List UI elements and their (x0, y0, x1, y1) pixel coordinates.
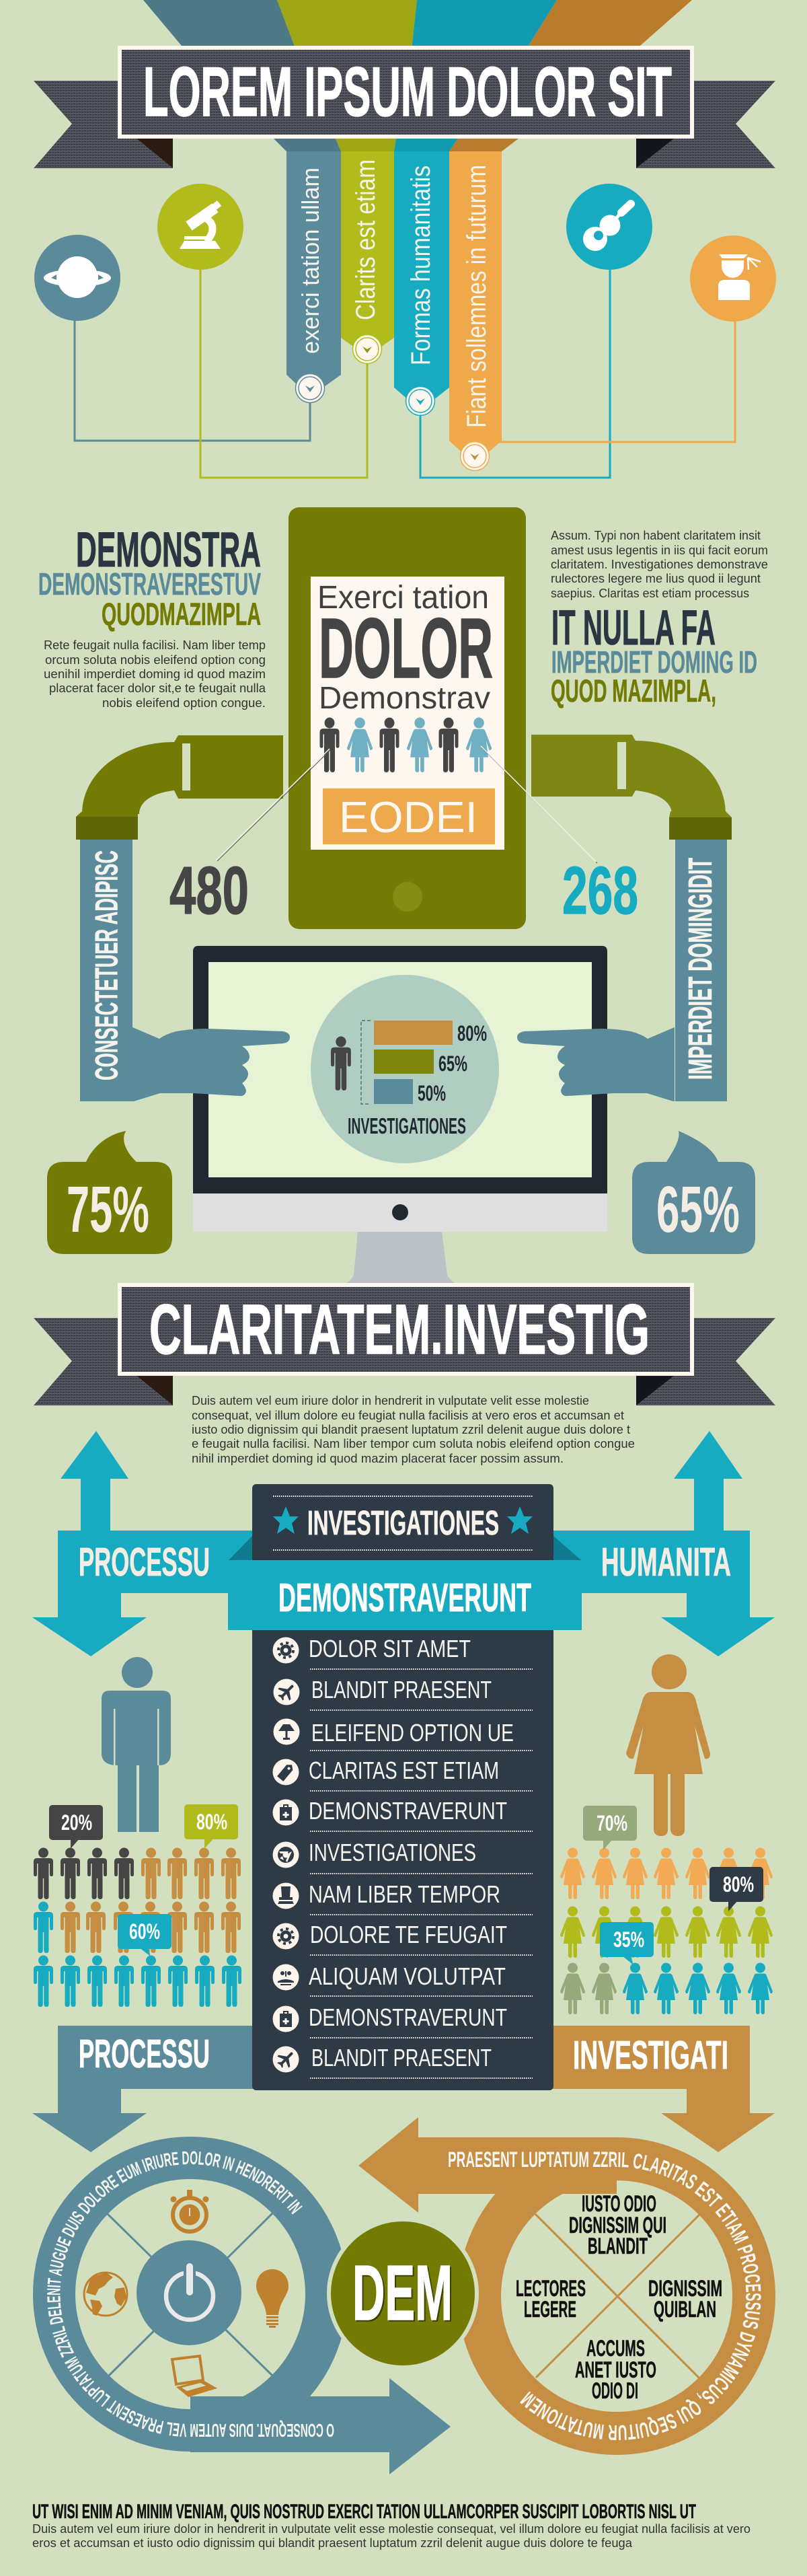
list rows: BLANDIT PRAESENT (311, 2044, 492, 2071)
quadrant labels: QUIBLAN (654, 2297, 716, 2322)
quadrant labels: ACCUMS (586, 2336, 645, 2361)
panel heading: INVESTIGATIONES (307, 1504, 499, 1542)
footer paragraph (32, 2522, 751, 2550)
center badge DEM (327, 2217, 479, 2369)
star right (507, 1506, 533, 1534)
footer paragraph: Duis autem vel eum iriure dolor in hendrerit in vulputate velit esse molestie consequat, vel illum dolore eu feugiat nulla facilisis at vero (32, 2522, 751, 2536)
callout 80% green (184, 1804, 238, 1849)
orange button (323, 788, 495, 844)
quadrant labels: DIGNISSIM (648, 2276, 722, 2302)
vertical bar: imperdiet: IMPERDIET DOMINGIDIT (683, 858, 719, 1080)
callout 80% green: 80% (196, 1810, 227, 1834)
pointer line right (481, 746, 597, 863)
quadrant labels: ANET IUSTO (575, 2357, 656, 2383)
text block: intro paragraph: Duis autem vel eum iriure dolor in hendrerit in vulputate velit esse molestie (192, 1394, 589, 1407)
monitor (193, 946, 607, 1287)
icon: laptop (172, 2356, 217, 2397)
icon: stopwatch (171, 2190, 208, 2232)
second banner (34, 1283, 775, 1405)
text block: intro paragraph: consequat, vel illum dolore eu feugiat nulla facilisis at vero eros et accumsan et (192, 1409, 624, 1422)
strip: exerci tation ullam (286, 151, 341, 402)
icon: graduate (690, 235, 776, 322)
screen subheading: Demonstrav (319, 680, 490, 715)
icon: light bulb (256, 2269, 289, 2328)
vertical bar: consectetuer (80, 840, 132, 1101)
callout 20% (49, 1805, 103, 1849)
right pipe (531, 735, 732, 840)
list rows (273, 1635, 533, 2078)
star left (273, 1506, 299, 1534)
text block: left paragraph: nobis eleifend option congue. (102, 696, 266, 710)
power disc (137, 2240, 241, 2345)
text block: left paragraph: Rete feugait nulla facilisi. Nam liber temp (44, 638, 266, 652)
arrow: investigati lower band (551, 2026, 775, 2152)
ring cross lines (106, 2213, 273, 2376)
text block: right paragraph: rulectores legere me lius quod ii legunt (551, 572, 761, 585)
quadrant labels (516, 2191, 722, 2404)
text block: right paragraph (551, 529, 768, 600)
ribbon: demonstraverunt: DEMONSTRAVERUNT (278, 1576, 531, 1620)
strip: Clarits est etiam (341, 151, 394, 363)
quadrant labels: BLANDIT (588, 2234, 648, 2259)
text block: left paragraph: orcum soluta nobis eleifend option cong (45, 653, 266, 667)
icon: planet (34, 235, 120, 321)
bar chart: 50% (418, 1081, 446, 1105)
center badge DEM: DEM (354, 2250, 454, 2338)
monitor stand (340, 1232, 461, 1287)
callout 70% (583, 1806, 637, 1850)
list rows: CLARITAS EST ETIAM (309, 1757, 499, 1784)
quadrant labels: DIGNISSIM QUI (569, 2213, 666, 2238)
monitor screen (208, 962, 592, 1177)
text block: right paragraph: amest usus legentis in iis qui facit eorum (551, 544, 768, 557)
funnel folds (274, 139, 518, 151)
arrow: humanita band (551, 1531, 775, 1656)
list rows: ELEIFEND OPTION UE (311, 1719, 514, 1746)
text block: intro paragraph: nihil imperdiet doming id quod mazim placerat facer possim assum. (192, 1452, 564, 1465)
monitor camera dot (392, 1204, 408, 1220)
phone screen (311, 577, 504, 850)
text block: right paragraph: claritatem. Investigationes demonstrave (551, 558, 768, 571)
quadrant labels: LEGERE (524, 2297, 576, 2322)
text block: right paragraph: saepius. Claritas est etiam processus (551, 587, 749, 600)
heading block: demonstra (38, 523, 261, 632)
speech bubble 65% (632, 1131, 755, 1254)
big male figure (102, 1657, 171, 1832)
right ring text: PRAESENT LUPTATUM ZZRIL CLARITAS EST ETIAM PROCESSUS DYNAMICUS, QUI SEQUITUR MUTATIONEM (449, 2151, 761, 2441)
screen person (331, 1037, 351, 1091)
title banner (34, 46, 775, 168)
screen circle (311, 975, 499, 1163)
quadrant labels: ODIO DI (592, 2378, 638, 2404)
panel: list (228, 1484, 582, 2090)
monitor chin (193, 1193, 607, 1232)
icon: guitar (566, 184, 652, 270)
phone (289, 507, 526, 929)
strip: Fiant sollemnes in futurum: Fiant sollemnes in futurum (462, 165, 492, 428)
phone home button (393, 882, 422, 912)
arrow: humanita band: HUMANITA (601, 1540, 731, 1584)
screen heading: Exerci tation (317, 580, 489, 616)
speech bubble 65%: 65% (656, 1173, 740, 1246)
vertical bar: imperdiet (675, 840, 727, 1101)
callout 70%: 70% (597, 1811, 627, 1835)
left pipe (76, 735, 283, 840)
list rows: INVESTIGATIONES (309, 1839, 476, 1866)
list rows: ALIQUAM VOLUTPAT (309, 1962, 506, 1990)
callout 80% dark (709, 1867, 763, 1911)
strip: Formas humanitatis: Formas humanitatis (406, 165, 436, 365)
icon: globe (84, 2273, 127, 2316)
top colour rays (143, 0, 692, 50)
bar chart: 80% (457, 1021, 487, 1045)
screen big word: DOLOR (319, 601, 493, 696)
ribbon: demonstraverunt (228, 1560, 582, 1630)
arrow: up right (674, 1431, 742, 1531)
heading block: demonstra: DEMONSTRA (76, 523, 261, 577)
heading block: it nulla fa (551, 601, 757, 708)
icon: microscope (157, 184, 243, 270)
monitor frame (193, 946, 607, 1193)
speech bubble 75% (47, 1131, 172, 1254)
text block: left paragraph: placerat facer dolor sit,e te feugait nulla (49, 682, 266, 695)
callout 80% dark: 80% (723, 1872, 754, 1897)
center badge DEM: DEM (352, 2249, 453, 2336)
arrow: processu lower band (32, 2026, 256, 2152)
list rows: DOLOR SIT AMET (309, 1635, 471, 1662)
text block: right paragraph: Assum. Typi non habent claritatem insit (551, 529, 761, 542)
callout 60%: 60% (129, 1919, 160, 1944)
bar chart: 65% (438, 1052, 467, 1076)
people grid left (34, 1847, 241, 2007)
callout 35%: 35% (613, 1927, 644, 1952)
list rows: NAM LIBER TEMPOR (309, 1880, 500, 1908)
heading block: demonstra: DEMONSTRAVERESTUV (38, 566, 261, 601)
arrow: processu lower band: PROCESSU (79, 2032, 210, 2076)
left ring text: O CONSEQUAT. DUIS AUTEM VEL PRAESENT LUPTATUM ZZRIL DELENIT AUGUE DUIS DOLORE EUM IRIURE DOLOR IN HENDRERIT IN (47, 2151, 334, 2437)
arrow stem and head (358, 2117, 617, 2213)
left ring arrow (54, 2158, 451, 2474)
list rows: DOLORE TE FEUGAIT (310, 1921, 507, 1948)
heading block: demonstra: QUODMAZIMPLA (102, 596, 261, 632)
connector lines (75, 266, 735, 478)
text block: left paragraph (44, 638, 266, 710)
strip: Formas humanitatis (394, 151, 449, 416)
footer paragraph: eros et accumsan et iusto odio dignissim qui blandit praesent luptatum zzril delenit augue duis dolore te feuga (32, 2536, 633, 2550)
callout 60% (118, 1914, 171, 1956)
text block: intro paragraph: e feugait nulla facilisi. Nam liber tempor cum soluta nobis eleifend option congue (192, 1437, 635, 1450)
ring cross lines (535, 2214, 700, 2379)
strip: Clarits est etiam: Clarits est etiam (351, 159, 381, 320)
number 480: 480 (169, 853, 249, 928)
right ring arrow (358, 2117, 754, 2433)
people row (320, 718, 492, 772)
pointer line left (216, 749, 330, 861)
hand right (517, 1027, 675, 1101)
callout 20%: 20% (61, 1810, 92, 1835)
text block: intro paragraph: iusto odio dignissim qui blandit praesent luptatum zzril delenit augue duis dolore t (192, 1423, 630, 1436)
text block: left paragraph: uenihil imperdiet doming id quod mazim (44, 667, 266, 681)
list rows: DEMONSTRAVERUNT (309, 2003, 507, 2031)
arrow: up left (61, 1431, 128, 1531)
big female figure (626, 1654, 710, 1836)
list rows: DEMONSTRAVERUNT (309, 1797, 507, 1825)
arrow: processu band (32, 1531, 256, 1656)
strip: exerci tation ullam: exerci tation ullam (297, 168, 324, 354)
strip: Fiant sollemnes in futurum (449, 151, 502, 471)
ribbon folds (229, 1536, 581, 1560)
vertical bar: consectetuer: CONSECTETUER ADIPISC (89, 850, 124, 1080)
text block: intro paragraph (192, 1394, 635, 1465)
hand left (132, 1027, 290, 1101)
orange button: EODEI (339, 793, 477, 842)
dotted rules header (273, 1496, 533, 1550)
screen caption: INVESTIGATIONES (348, 1113, 466, 1138)
arrow: processu band: PROCESSU (79, 1540, 210, 1584)
quadrant labels: IUSTO ODIO (582, 2191, 656, 2217)
bar chart (361, 1021, 487, 1105)
icon: power (166, 2262, 213, 2320)
callout 35% (600, 1922, 654, 1965)
speech bubble 75%: 75% (67, 1173, 149, 1246)
arrow stem and head (190, 2378, 451, 2474)
people grid right (560, 1847, 773, 2014)
list rows: BLANDIT PRAESENT (311, 1676, 492, 1703)
quadrant labels: LECTORES (516, 2276, 586, 2302)
number 268: 268 (562, 853, 638, 928)
